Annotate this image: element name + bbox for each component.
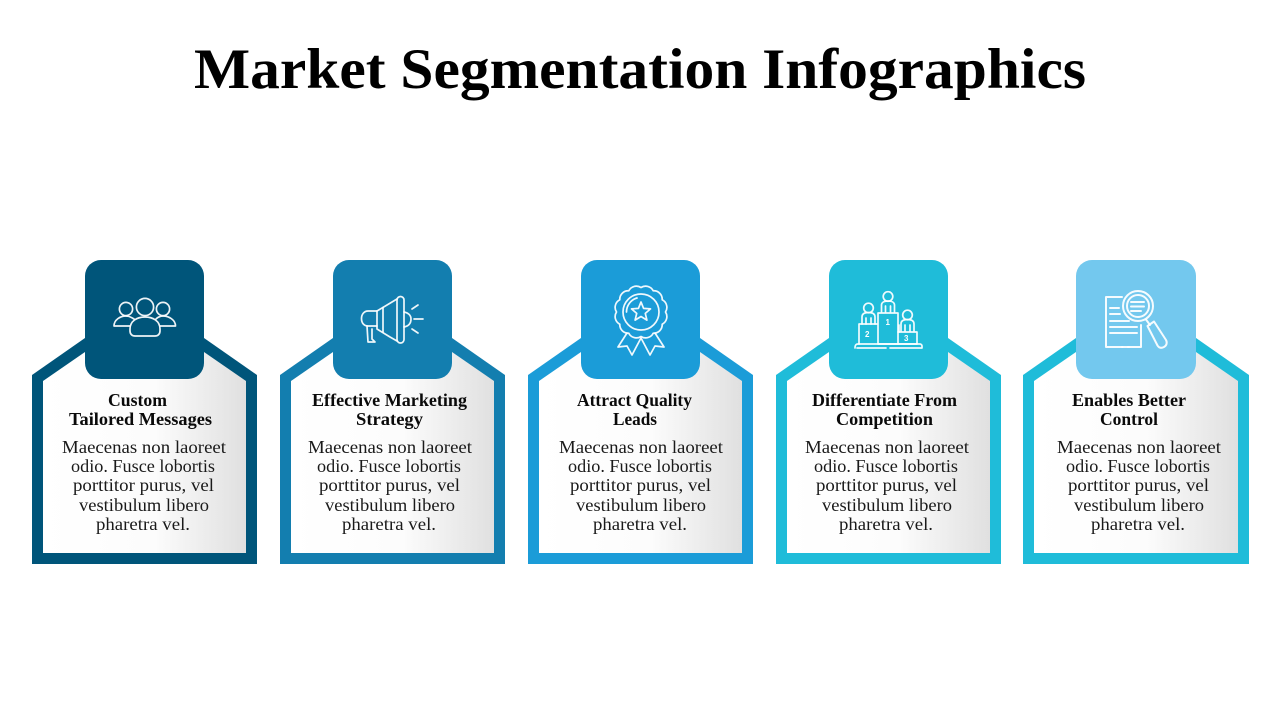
- body text 4: pharetra vel.: [839, 514, 933, 534]
- body text 3: odio. Fusce lobortis: [568, 456, 712, 476]
- body text 2: odio. Fusce lobortis: [317, 456, 461, 476]
- body text 1: Maecenas non laoreet: [62, 437, 226, 457]
- body text 4: vestibulum libero: [822, 495, 952, 515]
- body text 2: vestibulum libero: [325, 495, 455, 515]
- heading 5: Control: [1100, 409, 1158, 429]
- panel: Attract Quality Leads: [528, 260, 753, 564]
- heading 3: Attract Quality: [577, 390, 692, 410]
- body text 3: vestibulum libero: [576, 495, 706, 515]
- body text 1: vestibulum libero: [79, 495, 209, 515]
- body text 2: Maecenas non laoreet: [308, 437, 472, 457]
- body text 4: [805, 437, 969, 534]
- icon: podium: 3: [904, 334, 909, 343]
- body text 1: [62, 437, 226, 534]
- body text 2: pharetra vel.: [342, 514, 436, 534]
- body text 5: vestibulum libero: [1074, 495, 1204, 515]
- card interior 4: [787, 352, 990, 553]
- heading 2: Effective Marketing: [312, 390, 467, 410]
- icon: document and magnifier: [1106, 291, 1167, 348]
- icon: podium: 1: [886, 318, 890, 327]
- body text 3: porttitor purus, vel: [570, 475, 711, 495]
- body text 1: odio. Fusce lobortis: [71, 456, 215, 476]
- card frame 5: [1023, 338, 1249, 564]
- card interior 2: [291, 352, 494, 553]
- icon: award badge: [615, 286, 667, 355]
- body text 5: Maecenas non laoreet: [1057, 437, 1221, 457]
- heading 4: Competition: [836, 409, 933, 429]
- heading 5: [1072, 390, 1186, 429]
- icon tile 3: [581, 260, 700, 379]
- card interior 1: [43, 352, 246, 553]
- body text 3: [559, 437, 723, 534]
- body text 5: porttitor purus, vel: [1068, 475, 1209, 495]
- card interior 3: [539, 352, 742, 553]
- card frame 2: [280, 338, 505, 564]
- body text 2: [308, 437, 472, 534]
- heading 3: Leads: [613, 409, 657, 429]
- panel: Custom Tailored Messages: [32, 260, 257, 564]
- body text 2: porttitor purus, vel: [319, 475, 460, 495]
- card frame 3: [528, 338, 753, 564]
- icon: megaphone: [362, 296, 423, 343]
- heading 3: [577, 390, 692, 429]
- panel: Differentiate From Competition: [776, 260, 1001, 564]
- icon: podium: 2: [865, 330, 870, 339]
- title: Market Segmentation Infographics: [194, 38, 1086, 101]
- heading 1: Tailored Messages: [69, 409, 212, 429]
- panel: Effective Marketing Strategy: [280, 260, 505, 564]
- heading 2: Strategy: [356, 409, 423, 429]
- body text 1: pharetra vel.: [96, 514, 190, 534]
- icon: podium: [855, 292, 922, 348]
- body text 5: [1057, 437, 1221, 534]
- heading 5: Enables Better: [1072, 390, 1186, 410]
- body text 4: Maecenas non laoreet: [805, 437, 969, 457]
- body text 3: Maecenas non laoreet: [559, 437, 723, 457]
- body text 3: pharetra vel.: [593, 514, 687, 534]
- card frame 1: [32, 338, 257, 564]
- icon tile 1: [85, 260, 204, 379]
- icon tile 4: [829, 260, 948, 379]
- body text 5: pharetra vel.: [1091, 514, 1185, 534]
- icon tile 5: [1076, 260, 1196, 379]
- body text 4: porttitor purus, vel: [816, 475, 957, 495]
- heading 1: Custom: [108, 390, 167, 410]
- icon tile 2: [333, 260, 452, 379]
- heading 4: Differentiate From: [812, 390, 957, 410]
- card frame 4: [776, 338, 1001, 564]
- heading 2: [312, 390, 467, 429]
- body text 5: odio. Fusce lobortis: [1066, 456, 1210, 476]
- body text 1: porttitor purus, vel: [73, 475, 214, 495]
- icon: people group: [114, 298, 176, 336]
- heading 1: [69, 390, 212, 429]
- panel: Enables Better Control: [1023, 260, 1249, 564]
- heading 4: [812, 390, 957, 429]
- card interior 5: [1034, 352, 1238, 553]
- body text 4: odio. Fusce lobortis: [814, 456, 958, 476]
